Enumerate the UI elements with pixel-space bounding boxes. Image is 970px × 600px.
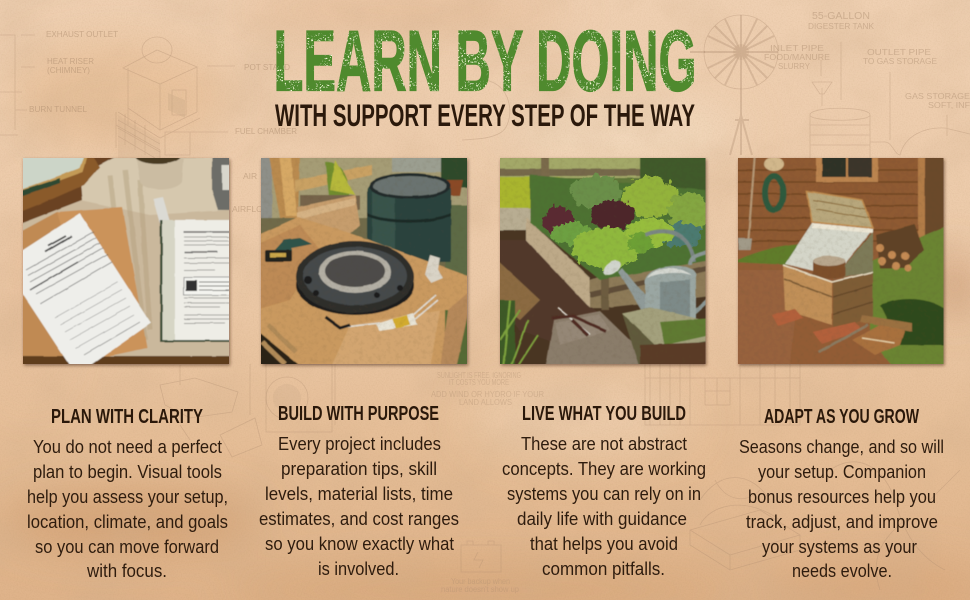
sketch: raised bed and battery [461, 462, 960, 590]
panel: plan with clarity [18, 148, 234, 581]
sketch labels middle: LAND ALLOWS [459, 398, 512, 407]
heading: plan with clarity: PLAN WITH CLARITY [51, 406, 203, 428]
panel: live what you build [495, 153, 711, 579]
sketch: sink and washer [160, 364, 335, 457]
panel: build with purpose [256, 153, 472, 579]
panel: adapt as you grow [733, 153, 949, 581]
sketch labels middle: SUNLIGHT IS FREE. IGNORING [437, 371, 521, 380]
text block: build with purpose: estimates, and cost ranges [259, 508, 459, 529]
leafy vegetables [542, 175, 708, 268]
text block: build with purpose [259, 433, 459, 579]
text block: adapt as you grow: bonus resources help you [748, 486, 936, 507]
text block: adapt as you grow: track, adjust, and improve [746, 511, 938, 532]
text block: live what you build: daily life with guidance [517, 508, 687, 529]
text block: plan with clarity: You do not need a perfect [33, 436, 222, 457]
sketch labels right [764, 11, 970, 110]
sketch labels left: AIRFLOW [232, 204, 271, 214]
sketch labels left: BURN TUNNEL [29, 104, 87, 114]
sketch labels right: GAS STORAGE [905, 92, 970, 101]
text block: plan with clarity: so you can move forward [35, 536, 219, 557]
sketch labels right: SLURRY [778, 62, 811, 71]
text block: plan with clarity: location, climate, and goals [27, 511, 228, 532]
sketch labels right: TO GAS STORAGE [863, 57, 937, 66]
text block: plan with clarity: help you assess your setup, [27, 486, 228, 507]
sketch labels left: POT STAND [244, 62, 290, 72]
text block: plan with clarity: plan to begin. Visual tools [33, 461, 222, 482]
text block: live what you build: that helps you avoid [530, 533, 678, 554]
heading: live what you build: LIVE WHAT YOU BUILD [522, 403, 686, 425]
text block: live what you build: concepts. They are working [502, 458, 706, 479]
sketch: windmill [690, 15, 778, 155]
sketch labels right: INLET PIPE [770, 44, 824, 53]
sketch labels middle: Your backup when [451, 577, 510, 586]
sketch labels right: FOOD/MANURE [764, 53, 830, 62]
sketch labels left: (CHIMNEY) [47, 65, 90, 75]
sketch labels right: DIGESTER TANK [808, 22, 875, 31]
photo: raised garden bed with watering can [495, 153, 711, 369]
text block: build with purpose: is involved. [318, 558, 399, 579]
sketch labels middle: ADD WIND OR HYDRO IF YOUR [431, 390, 544, 399]
sketch labels left: HEAT RISER [47, 56, 94, 66]
sketch: rocket stove [0, 35, 235, 158]
sketch labels middle: IT COSTS YOU MORE [449, 378, 509, 387]
sketch: sun arc near subtitle [462, 80, 510, 140]
text block: build with purpose: levels, material lists, time [265, 483, 453, 504]
sketch labels left [29, 29, 297, 214]
sketch labels left: AIR [243, 171, 257, 181]
heading: build with purpose: BUILD WITH PURPOSE [278, 403, 439, 425]
text block: live what you build: systems you can rely on in [507, 483, 701, 504]
text block: build with purpose: Every project includes [278, 433, 441, 454]
sketch labels middle [431, 371, 544, 594]
sketch labels middle: nature doesn't show up [441, 585, 520, 594]
text block: adapt as you grow: Seasons change, and so will [739, 436, 944, 457]
text block: adapt as you grow [739, 436, 944, 581]
sketch labels right: 55-GALLON [812, 11, 870, 22]
sketch labels left: FUEL CHAMBER [235, 126, 297, 136]
text block: adapt as you grow: your systems as your [762, 536, 917, 557]
sketch labels right: SOFT, INF [928, 101, 970, 110]
photo: solar cooker box by cabin [733, 153, 949, 369]
text block: adapt as you grow: your setup. Companion [758, 461, 926, 482]
text block: live what you build: common pitfalls. [542, 558, 665, 579]
text block: adapt as you grow: needs evolve. [792, 560, 892, 581]
text block: build with purpose: so you know exactly what [265, 533, 454, 554]
text block: plan with clarity: with focus. [86, 560, 167, 581]
text block: live what you build: These are not abstract [521, 433, 687, 454]
sketch: digester tank and gas bag [810, 42, 970, 160]
sketch labels left: EXHAUST OUTLET [46, 29, 118, 39]
photo: workbench with barrel fitting [256, 153, 472, 369]
subtitle: WITH SUPPORT EVERY STEP OF THE WAY [275, 97, 695, 133]
text block: live what you build [502, 433, 706, 579]
text block: plan with clarity [27, 436, 228, 581]
text block: build with purpose: preparation tips, skill [281, 458, 437, 479]
sketch: shed [645, 364, 800, 425]
photo: planning paperwork on table [18, 148, 234, 369]
sketch labels right: OUTLET PIPE [867, 48, 931, 57]
